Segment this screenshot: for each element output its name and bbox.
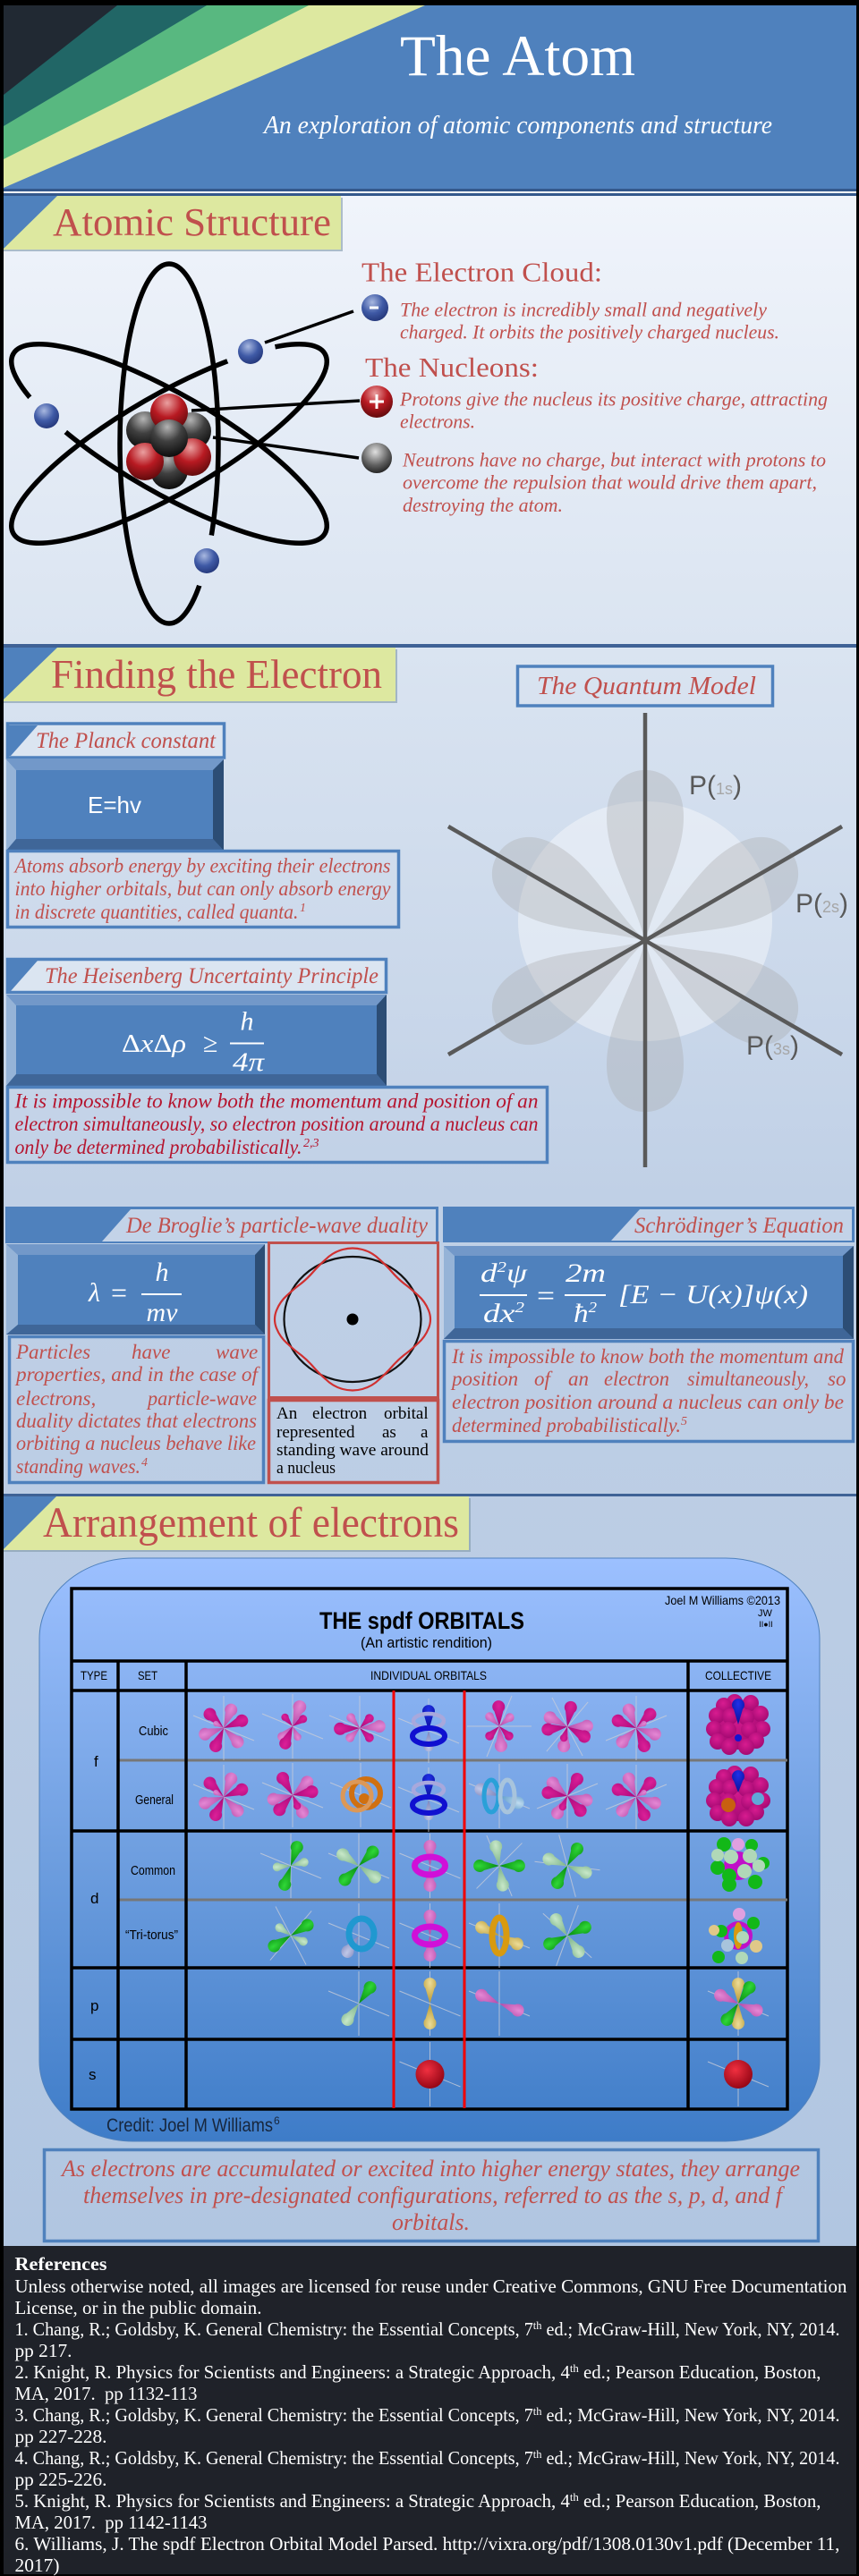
references list: [14, 2275, 847, 2576]
equation box: Schrodinger: dx: [483, 1299, 508, 1328]
chart subtitle: (An artistic rendition): [361, 1634, 492, 1651]
text: De Broglie description: 4: [141, 1456, 148, 1470]
caption: standing wave: electron: [312, 1404, 368, 1423]
collective orbitals: [706, 1694, 770, 2106]
nucleus dot: [347, 1313, 358, 1326]
equation box: E=hv: [6, 759, 224, 851]
equation box: E=hv: E=hv: [88, 792, 141, 818]
references list: MA, 2017. pp 1142-1143: [14, 2512, 208, 2533]
shell blob: [518, 801, 772, 1041]
caption: standing wave: [268, 1401, 438, 1483]
caption: standing wave: standing wave around: [276, 1441, 430, 1460]
caption: standing wave: represented: [276, 1423, 355, 1442]
heading: De Broglie: De Broglie’s particle-wave duality: [125, 1214, 429, 1238]
references list: License, or in the public domain.: [14, 2297, 261, 2318]
equation box: wavelength: =: [111, 1276, 127, 1309]
references list: th: [533, 2404, 542, 2418]
references list: ed.; McGraw-Hill, New York, NY, 2014.: [541, 2404, 839, 2426]
text: Planck description: 1: [300, 902, 306, 915]
equation box: Schrodinger: 2: [589, 1299, 598, 1316]
equation box: Schrodinger: 2: [498, 1258, 507, 1275]
heading: De Broglie: [5, 1207, 438, 1243]
nucleus: [126, 394, 211, 489]
column headers: [81, 1668, 771, 1682]
text: Planck description: into higher orbitals, but can only absorb energy: [14, 877, 391, 900]
text: Heisenberg description: [7, 1088, 548, 1163]
section heading: Atomic Structure: Atomic Structure: [53, 200, 331, 244]
references list: 2. Knight, R. Physics for Scientists and Engineers: a Strategic Approach, 4: [14, 2361, 576, 2383]
text: De Broglie description: duality dictates that electrons: [16, 1410, 257, 1432]
row labels: d: [90, 1890, 98, 1907]
text: De Broglie description: [9, 1336, 263, 1483]
text: Heisenberg description: only be determined probabilistically.: [14, 1136, 302, 1158]
column headers: TYPE: [81, 1668, 107, 1682]
orbitals: d tri-torus row: [247, 1892, 607, 1979]
references list: th: [570, 2361, 579, 2375]
text: Schrodinger description: It is impossible to know both the momentum and: [451, 1345, 844, 1368]
text: Schrodinger description: electron position around a nucleus can only be: [452, 1391, 844, 1413]
caption: standing wave: a nucleus: [276, 1459, 336, 1478]
equation box: wavelength: λ: [88, 1278, 100, 1308]
text: Planck description: [7, 852, 399, 927]
orbitals: d common row: [260, 1822, 605, 1910]
section heading: Atomic Structure: [4, 196, 343, 251]
row labels: “Tri-torus”: [125, 1928, 178, 1943]
equation box: Schrodinger: =: [537, 1279, 555, 1311]
equation box: uncertainty: ≥: [203, 1029, 217, 1058]
references list: th: [570, 2490, 579, 2504]
text: Schrodinger description: electron: [604, 1368, 669, 1390]
references list: th: [533, 2318, 542, 2332]
equation box: Schrodinger: 2m: [566, 1258, 606, 1288]
equation box: wavelength: h: [156, 1258, 168, 1287]
panel: Heisenberg uncertainty principle: [6, 959, 548, 1163]
equation box: uncertainty: h: [240, 1007, 254, 1036]
text: De Broglie description: standing waves.: [16, 1455, 140, 1478]
text: De Broglie description: properties, and in the case of: [14, 1363, 261, 1385]
heading: Planck constant: [7, 724, 224, 758]
equation box: Schrodinger: [444, 1246, 854, 1339]
caption: standing wave: a: [421, 1423, 429, 1442]
text: neutron description: destroying the atom.: [403, 494, 563, 516]
text: De Broglie description: particle-wave: [146, 1387, 257, 1410]
section heading: Finding the Electron: Finding the Electron: [51, 651, 382, 697]
row labels: s: [89, 2066, 97, 2083]
row labels: [89, 1724, 178, 2083]
references list: 1. Chang, R.; Goldsby, K. General Chemistry: the Essential Concepts, 7: [14, 2318, 556, 2340]
chart title: THE spdf ORBITALS: [319, 1607, 524, 1634]
chart credit: Credit: Joel M Williams: [106, 2115, 273, 2136]
references list: 4. Chang, R.; Goldsby, K. General Chemistry: the Essential Concepts, 7: [14, 2447, 556, 2469]
text: Schrodinger description: simultaneously,: [687, 1368, 809, 1390]
row labels: Cubic: [139, 1724, 168, 1739]
references list: ed.; McGraw-Hill, New York, NY, 2014.: [541, 2318, 839, 2340]
references list: pp 225-226.: [14, 2469, 107, 2490]
column headers: INDIVIDUAL ORBITALS: [370, 1668, 487, 1682]
column headers: COLLECTIVE: [705, 1668, 771, 1682]
chart credit mark: JW: [758, 1608, 773, 1619]
label P(3s): P(3s): [746, 1031, 799, 1061]
row labels: Common: [131, 1863, 175, 1878]
text: electron description: [400, 299, 779, 343]
text: proton description: [399, 388, 828, 433]
text: orbital arrangement description: themselves in pre-designated configurations, referred to as the s, p, d, and f: [83, 2182, 786, 2208]
heading: The Quantum Model: The Quantum Model: [537, 673, 756, 700]
text: neutron description: Neutrons have no charge, but interact with protons to: [402, 449, 826, 470]
heading: The Nucleons: The Nucleons:: [365, 352, 539, 383]
orbitals: f general row: [193, 1763, 667, 1832]
text: Schrodinger description: [444, 1342, 854, 1442]
axes: [448, 713, 842, 1167]
row labels: f: [94, 1753, 98, 1770]
icon: electron: [361, 294, 388, 321]
text: Schrodinger description: position: [450, 1368, 518, 1390]
atom diagram: [0, 264, 350, 623]
equation box: Schrodinger: [E − U(x)]ψ(x): [618, 1280, 808, 1309]
equation box: uncertainty: 4π: [233, 1047, 265, 1077]
chart credit mark: [665, 1593, 780, 1629]
references list: 2017): [14, 2555, 59, 2576]
orbitals: s row: [399, 2042, 460, 2106]
label P(2s): P(2s): [795, 889, 848, 919]
lobes: [478, 770, 812, 1112]
column headers: SET: [138, 1668, 157, 1682]
orbitals: p row: [328, 1971, 530, 2036]
text: electron description: charged. It orbits the positively charged nucleus.: [400, 320, 779, 343]
text: proton description: electrons.: [400, 410, 475, 433]
text: Schrodinger description: determined probabilistically.: [452, 1414, 681, 1436]
references list: 5. Knight, R. Physics for Scientists and Engineers: a Strategic Approach, 4: [14, 2490, 576, 2512]
caption: standing wave: orbital: [384, 1404, 429, 1423]
panel: spdf orbitals chart: [39, 1558, 820, 2141]
text: orbital arrangement description: orbitals.: [392, 2209, 470, 2235]
panel: standing wave diagram: [268, 1243, 438, 1397]
equation box: uncertainty: ΔxΔρ: [122, 1030, 186, 1058]
title: The Atom: [400, 24, 635, 89]
references list: 3. Chang, R.; Goldsby, K. General Chemistry: the Essential Concepts, 7: [14, 2404, 556, 2426]
text: Heisenberg description: 2,3: [303, 1137, 319, 1150]
equation box: wavelength: [6, 1244, 265, 1335]
table grid: [72, 1589, 787, 2109]
references list: 6. Williams, J. The spdf Electron Orbital Model Parsed. http://vixra.org/pdf/1308.0130v1.pdf (December 11,: [14, 2533, 839, 2555]
chart credit mark: II●II: [759, 1620, 773, 1629]
references list: Unless otherwise noted, all images are licensed for reuse under Creative Commons, GNU Free Documentation: [14, 2275, 847, 2297]
text: Schrodinger description: of: [534, 1368, 553, 1390]
references list: ed.; Pearson Education, Boston,: [579, 2490, 821, 2512]
references list: pp 217.: [14, 2340, 72, 2361]
subtitle: An exploration of atomic components and structure: [262, 112, 772, 140]
page body background: [4, 196, 856, 2246]
text: orbital arrangement description: As electrons are accumulated or excited into higher energy states, they arrange: [60, 2156, 800, 2182]
chart: quantum probability lobes: [448, 713, 848, 1167]
electrons: [34, 339, 263, 573]
heading: Planck constant: The Planck constant: [36, 729, 217, 753]
equation box: uncertainty: [6, 995, 387, 1086]
row labels: General: [135, 1792, 174, 1808]
heading: Heisenberg: [7, 959, 387, 993]
references list: ed.; McGraw-Hill, New York, NY, 2014.: [541, 2447, 839, 2469]
heading: The Quantum Model: [517, 666, 773, 706]
references panel: [4, 2246, 856, 2576]
orbitals: f cubic row: [193, 1682, 667, 1771]
references list: th: [533, 2447, 542, 2461]
standing wave: [275, 1249, 430, 1390]
text: Heisenberg description: electron simultaneously, so electron position around a nucleus can: [14, 1113, 539, 1135]
text: De Broglie description: wave: [216, 1341, 258, 1363]
text: electron description: The electron is incredibly small and negatively: [400, 299, 767, 320]
text: Schrodinger description: so: [828, 1368, 846, 1390]
text: Planck description: in discrete quantities, called quanta.: [14, 901, 299, 923]
text: De Broglie description: have: [132, 1341, 170, 1363]
panel: Planck constant: [6, 724, 399, 927]
equation box: Schrodinger: 2: [515, 1299, 525, 1316]
orbit rings: [0, 264, 350, 623]
icon: neutron: [361, 443, 392, 473]
chart credit mark: Joel M Williams ©2013: [665, 1593, 780, 1607]
references list: ed.; Pearson Education, Boston,: [579, 2361, 821, 2383]
caption: standing wave: An: [276, 1404, 298, 1423]
icon: proton: [361, 386, 393, 418]
heading: Schrodinger: [443, 1207, 855, 1242]
equation box: Schrodinger: ψ: [506, 1258, 529, 1288]
header banner: [4, 5, 856, 196]
equation box: Schrodinger: d: [481, 1258, 494, 1288]
callout lines: [191, 311, 360, 458]
panel: Schrodinger equation: [443, 1207, 855, 1442]
equation box: wavelength: mv: [147, 1298, 178, 1327]
credit superscript: 6: [274, 2114, 280, 2127]
references heading: References: [14, 2253, 107, 2275]
text: neutron description: [402, 449, 826, 516]
row labels: p: [90, 1997, 98, 2014]
text: neutron description: overcome the repulsion that would drive them apart,: [403, 470, 817, 494]
heading: The Electron Cloud: The Electron Cloud:: [361, 256, 602, 288]
text: orbital arrangement description: [45, 2150, 818, 2241]
text: Schrodinger description: an: [568, 1368, 589, 1390]
caption: standing wave: as: [382, 1423, 396, 1442]
text: De Broglie description: electrons,: [16, 1387, 96, 1410]
text: De Broglie description: orbiting a nucleus behave like: [16, 1432, 256, 1454]
references list: pp 227-228.: [14, 2426, 107, 2447]
text: Heisenberg description: It is impossible to know both the momentum and position of an: [13, 1089, 539, 1113]
label P(1s): P(1s): [689, 771, 742, 801]
heading: Schrodinger: Schrödinger’s Equation: [634, 1214, 844, 1238]
section divider: [4, 1494, 856, 1496]
text: Planck description: Atoms absorb energy by exciting their electrons: [13, 855, 391, 877]
text: De Broglie description: Particles: [15, 1341, 90, 1363]
references list: MA, 2017. pp 1132-113: [14, 2383, 197, 2404]
panel: De Broglie duality: [5, 1207, 438, 1483]
equation box: Schrodinger: ħ: [574, 1299, 587, 1328]
section heading: Arrangement of electrons: Arrangement of electrons: [43, 1499, 459, 1546]
section divider: [4, 644, 856, 648]
text: proton description: Protons give the nucleus its positive charge, attracting: [399, 388, 828, 410]
heading: Heisenberg: The Heisenberg Uncertainty Principle: [45, 964, 378, 988]
text: Schrodinger description: 5: [681, 1415, 687, 1428]
